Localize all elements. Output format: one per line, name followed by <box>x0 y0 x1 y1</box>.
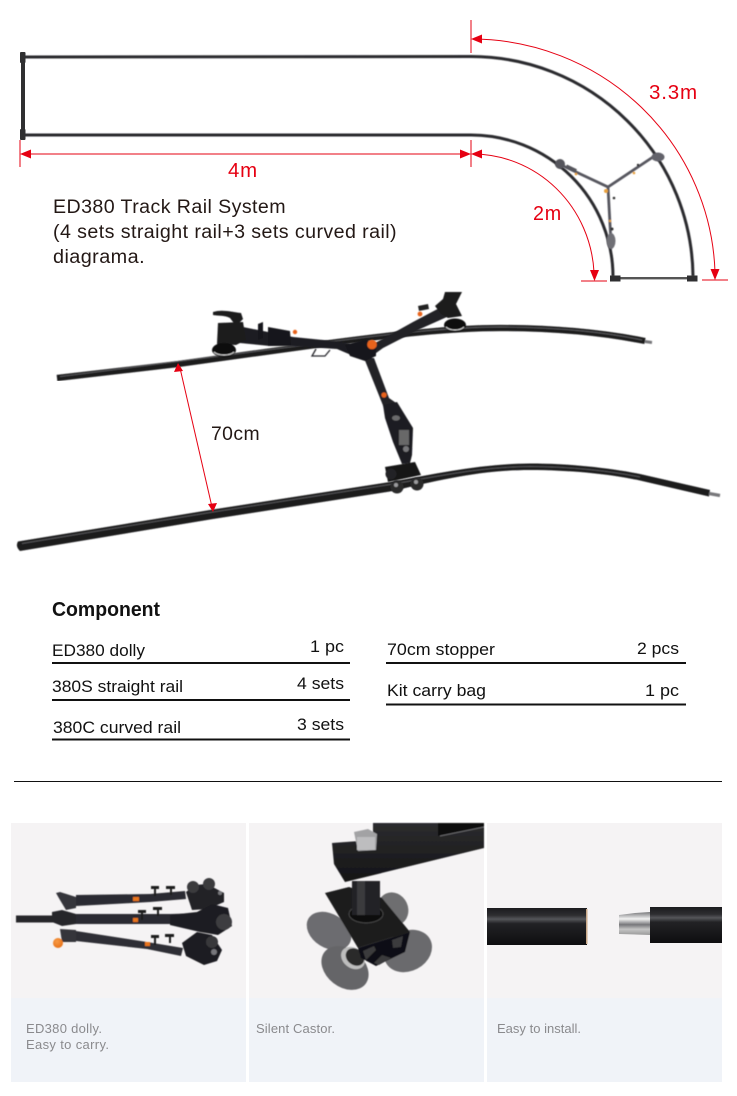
component list: right column <box>386 639 686 706</box>
caption: ED380 dolly. <box>26 1021 102 1036</box>
left clamp <box>217 322 246 345</box>
diagram caption <box>53 197 397 268</box>
stem <box>349 905 383 923</box>
dimension: 70cm <box>174 363 260 512</box>
row: 380S straight rail: 380S straight rail <box>52 677 183 696</box>
panel: folded dolly <box>11 823 246 1082</box>
row: 380S straight rail <box>52 674 350 701</box>
lower foot <box>385 462 421 482</box>
lower wheels <box>390 480 404 494</box>
track rail diagram <box>20 20 728 282</box>
outer rail <box>24 56 693 276</box>
row: 380C curved rail <box>52 715 350 740</box>
upper rail <box>57 327 652 378</box>
left wheels <box>212 343 236 357</box>
row: ED380 dolly: 1 pc <box>310 637 345 656</box>
right clamp <box>435 292 462 318</box>
caption: Silent Castor. <box>256 1021 335 1036</box>
panel: easy to install <box>487 823 722 1082</box>
row: 380C curved rail: 3 sets <box>297 715 344 734</box>
illustration: castor <box>300 823 484 999</box>
panel: silent castor <box>249 823 484 1082</box>
row: Kit carry bag <box>386 681 686 706</box>
row: 380S straight rail: 4 sets <box>297 674 344 693</box>
row: 70cm stopper <box>386 639 686 664</box>
back wheel <box>372 887 414 931</box>
diagram caption: diagrama. <box>53 247 145 268</box>
strap loop <box>312 349 330 356</box>
small dolly in diagram <box>555 152 664 249</box>
front left wheel <box>313 937 377 999</box>
dimension: 3.3m: 3.3m <box>649 82 698 104</box>
right end stopper <box>610 276 698 282</box>
dimension: 2m: 2m <box>533 203 562 225</box>
caption <box>26 1021 109 1052</box>
dolly on rails photo illustration <box>17 292 720 551</box>
component heading: Component <box>52 599 160 621</box>
illustration: folded dolly <box>16 878 232 965</box>
dolly body <box>212 292 466 494</box>
component list: left column <box>52 637 350 740</box>
left arm <box>222 325 363 360</box>
right arm <box>362 304 458 356</box>
diagram caption: (4 sets straight rail+3 sets curved rail) <box>53 222 397 243</box>
dimension: 2m <box>471 150 607 281</box>
dimension: 70cm: 70cm <box>211 424 260 445</box>
left wheel <box>300 904 358 958</box>
row: Kit carry bag: 1 pc <box>645 681 680 700</box>
lower clamp <box>383 402 413 464</box>
illustration: rail connector <box>487 907 722 945</box>
beam <box>332 823 484 882</box>
left end stopper <box>20 52 26 140</box>
down arm <box>364 358 399 408</box>
caption: Easy to carry. <box>26 1037 109 1052</box>
row: ED380 dolly: ED380 dolly <box>52 641 146 660</box>
right wheel <box>377 922 439 980</box>
caption: Easy to install. <box>497 1021 581 1036</box>
dimension: 4m <box>20 140 471 182</box>
row: 380C curved rail: 380C curved rail <box>53 718 181 737</box>
row: 70cm stopper: 2 pcs <box>637 639 679 658</box>
row: 70cm stopper: 70cm stopper <box>387 640 495 659</box>
row: Kit carry bag: Kit carry bag <box>387 681 486 700</box>
right wheels <box>444 318 466 332</box>
orange knobs <box>367 340 377 349</box>
lower rail <box>17 464 720 551</box>
hub <box>345 339 376 361</box>
inner rail <box>24 135 613 276</box>
plate front face <box>358 932 410 966</box>
diagram caption: ED380 Track Rail System <box>53 197 286 218</box>
dimension: 3.3m <box>471 20 728 280</box>
plate <box>325 887 410 948</box>
dimension: 4m: 4m <box>228 160 258 182</box>
bolt <box>354 829 377 851</box>
row: ED380 dolly <box>52 637 350 664</box>
